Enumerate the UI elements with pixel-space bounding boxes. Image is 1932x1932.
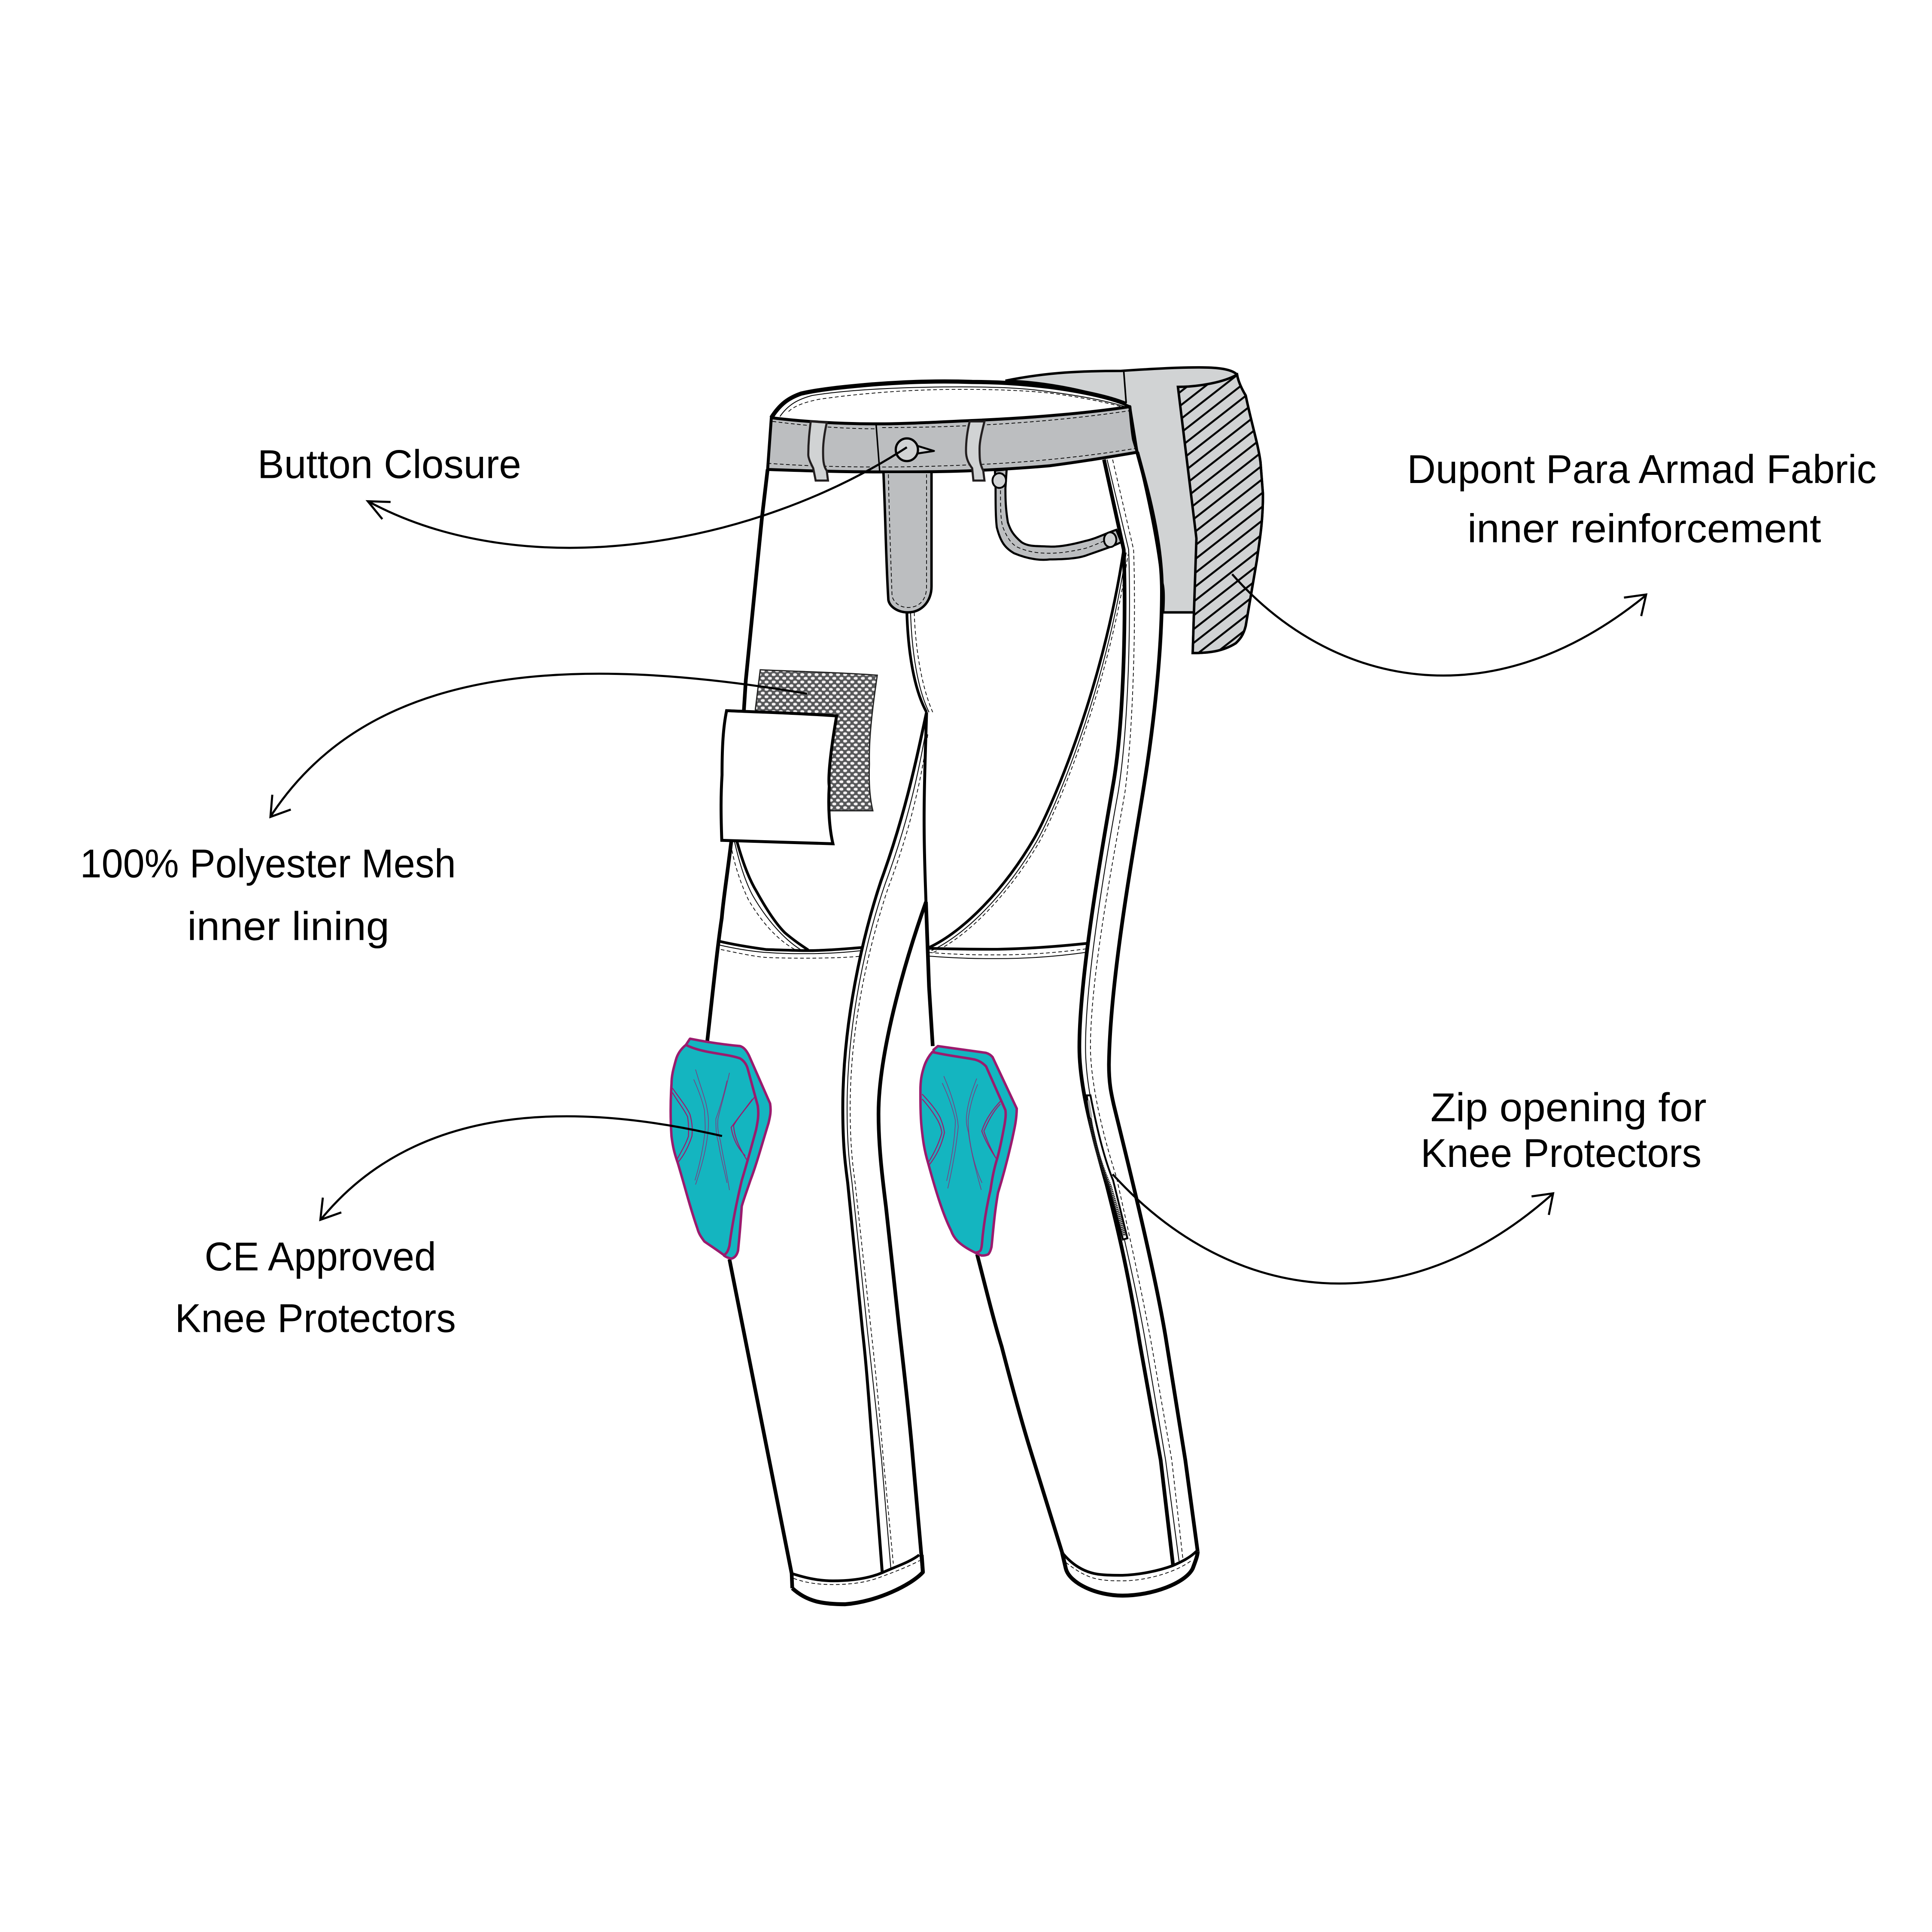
outer left side seam upper xyxy=(744,469,768,711)
waistband xyxy=(768,407,1137,472)
arrow: para aramid fabric xyxy=(1232,574,1646,675)
pocket flap xyxy=(721,711,837,844)
left leg hem xyxy=(792,1555,923,1604)
label: para aramid fabric xyxy=(1407,447,1877,551)
label: CE approved: Knee Protectors xyxy=(175,1296,456,1340)
pants illustration xyxy=(671,368,1263,1604)
label: polyester mesh: inner lining xyxy=(187,904,389,949)
mesh inner lining swatch xyxy=(755,670,877,811)
label: para aramid fabric: inner reinforcement xyxy=(1467,506,1821,551)
arrow: knee zip xyxy=(1113,1174,1553,1284)
belt loop right xyxy=(966,422,984,480)
belt loop left xyxy=(808,422,828,480)
left leg inseam xyxy=(878,902,926,1572)
label: polyester mesh: 100% Polyester Mesh xyxy=(80,841,456,886)
inner reinforcement back panel xyxy=(1005,368,1263,653)
left leg lower outer edge xyxy=(729,1259,792,1588)
label: zip opening: Knee Protectors xyxy=(1421,1131,1701,1176)
right thigh curved panel seam xyxy=(929,550,1128,959)
label: zip opening xyxy=(1421,1085,1707,1176)
right side double seam xyxy=(1079,459,1183,1565)
outer left side seam lower xyxy=(707,840,732,1041)
front waist opening rim xyxy=(772,382,1126,418)
right outer side seam xyxy=(1109,452,1198,1551)
knee zip opening xyxy=(1087,1095,1127,1239)
right leg inner edge xyxy=(926,902,933,1046)
fly tab xyxy=(884,472,932,612)
left leg double seam xyxy=(843,712,928,1572)
label: CE approved: CE Approved xyxy=(204,1234,436,1279)
right leg lower inner edge xyxy=(977,1255,1062,1552)
left thigh panel seams xyxy=(720,841,863,958)
label: polyester mesh xyxy=(80,841,456,949)
right knee protector xyxy=(920,1046,1017,1255)
arrow: button closure xyxy=(368,447,907,548)
button closure xyxy=(896,438,934,461)
hatched para-aramid fabric xyxy=(1178,374,1263,653)
fly seam xyxy=(907,612,933,902)
label: button closure: Button Closure xyxy=(258,442,521,487)
right leg hem xyxy=(1062,1551,1198,1596)
left knee protector xyxy=(671,1039,771,1259)
label: zip opening: Zip opening for xyxy=(1431,1085,1707,1130)
arrow: mesh lining xyxy=(270,674,807,817)
coin pocket welt with rivets xyxy=(993,469,1121,560)
label: CE approved xyxy=(175,1234,456,1340)
label: para aramid fabric: Dupont Para Armad Fabric xyxy=(1407,447,1877,492)
arrow: knee protectors xyxy=(320,1116,722,1220)
